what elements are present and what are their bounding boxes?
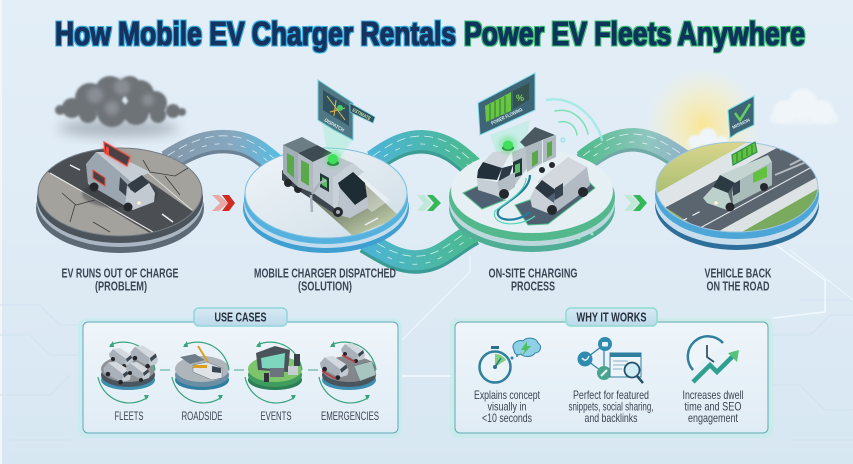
icon: stranded van with empty battery <box>82 142 158 212</box>
why it works descriptions: visually in <box>488 400 526 414</box>
panel: why it works <box>450 308 773 438</box>
icon: recharged van <box>703 155 772 212</box>
icon: dispatch map sign: DISPATCH <box>323 118 345 134</box>
step labels: PROCESS <box>511 280 555 294</box>
use case labels: ROADSIDE <box>182 409 222 423</box>
icon: mission complete check sign: MISSION <box>731 117 751 130</box>
icon: emergencies <box>319 341 376 403</box>
step labels: (SOLUTION) <box>298 280 352 294</box>
icon: wireless signal arcs <box>547 99 602 142</box>
icon: dispatch map sign: ESTIMATE <box>351 107 372 122</box>
use case connectors <box>160 369 318 371</box>
icon: power flowing battery sign: % <box>516 93 524 103</box>
step labels: (PROBLEM) <box>95 280 147 294</box>
icon: mission complete check sign <box>728 96 754 138</box>
icon: dispatch map sign <box>318 80 375 140</box>
icon: power flowing battery sign <box>478 73 535 135</box>
heading: why it works: WHY IT WORKS <box>576 310 647 324</box>
why it works descriptions: Increases dwell <box>682 388 744 402</box>
title <box>55 15 805 52</box>
why it works descriptions: and backlinks <box>584 411 638 425</box>
use case labels: EMERGENCIES <box>321 409 379 423</box>
step labels: MOBILE CHARGER DISPATCHED <box>254 266 396 280</box>
storm cloud <box>55 76 186 137</box>
use case labels: FLEETS <box>114 409 144 423</box>
icon: clock and rising trend <box>688 336 739 382</box>
step labels: VEHICLE BACK <box>704 266 772 280</box>
why it works descriptions <box>474 388 744 425</box>
step labels: ON-SITE CHARGING <box>488 266 578 280</box>
why it works descriptions: <10 seconds <box>482 411 532 425</box>
icon: full battery on van <box>732 142 757 165</box>
arrow: red chevrons <box>212 195 235 211</box>
panel: use cases <box>78 308 402 438</box>
step labels: EV RUNS OUT OF CHARGE <box>62 266 178 280</box>
glowing panel connector lines <box>402 243 853 376</box>
icon: fleets <box>98 341 158 403</box>
icon: power flowing battery sign: POWER FLOWING <box>490 107 524 127</box>
title: How Mobile EV Charger Rentals <box>55 15 456 52</box>
arrow: second green chevrons <box>624 195 647 211</box>
step 4: vehicle back on the road disc <box>655 142 819 250</box>
why it works descriptions: Perfect for featured <box>573 388 649 402</box>
why it works descriptions: engagement <box>688 411 738 425</box>
why it works descriptions: time and SEO <box>684 400 742 414</box>
why it works descriptions: Explains concept <box>474 388 540 402</box>
connecting circuit road ribbons <box>167 134 690 264</box>
why it works descriptions: snippets, social sharing, <box>568 400 654 414</box>
use case labels <box>114 409 379 423</box>
step labels <box>62 266 772 294</box>
icon: mobile charging truck <box>282 120 368 218</box>
icon: roadside <box>172 341 229 403</box>
use case labels: EVENTS <box>260 409 292 423</box>
icon: stopwatch with lightning cloud <box>480 338 541 382</box>
step 2: mobile charger dispatched disc <box>243 148 409 253</box>
icon: social sharing and search <box>578 337 643 383</box>
icon: truck charging a van <box>477 120 590 224</box>
heading: use cases: USE CASES <box>214 310 267 324</box>
step labels: ON THE ROAD <box>706 280 770 294</box>
step 1: EV runs out of charge disc <box>36 140 205 253</box>
step 3: on-site charging disc <box>449 149 615 252</box>
icon: events <box>245 341 302 403</box>
arrow: first green chevrons <box>417 195 441 211</box>
sun glow and sky <box>645 67 838 183</box>
